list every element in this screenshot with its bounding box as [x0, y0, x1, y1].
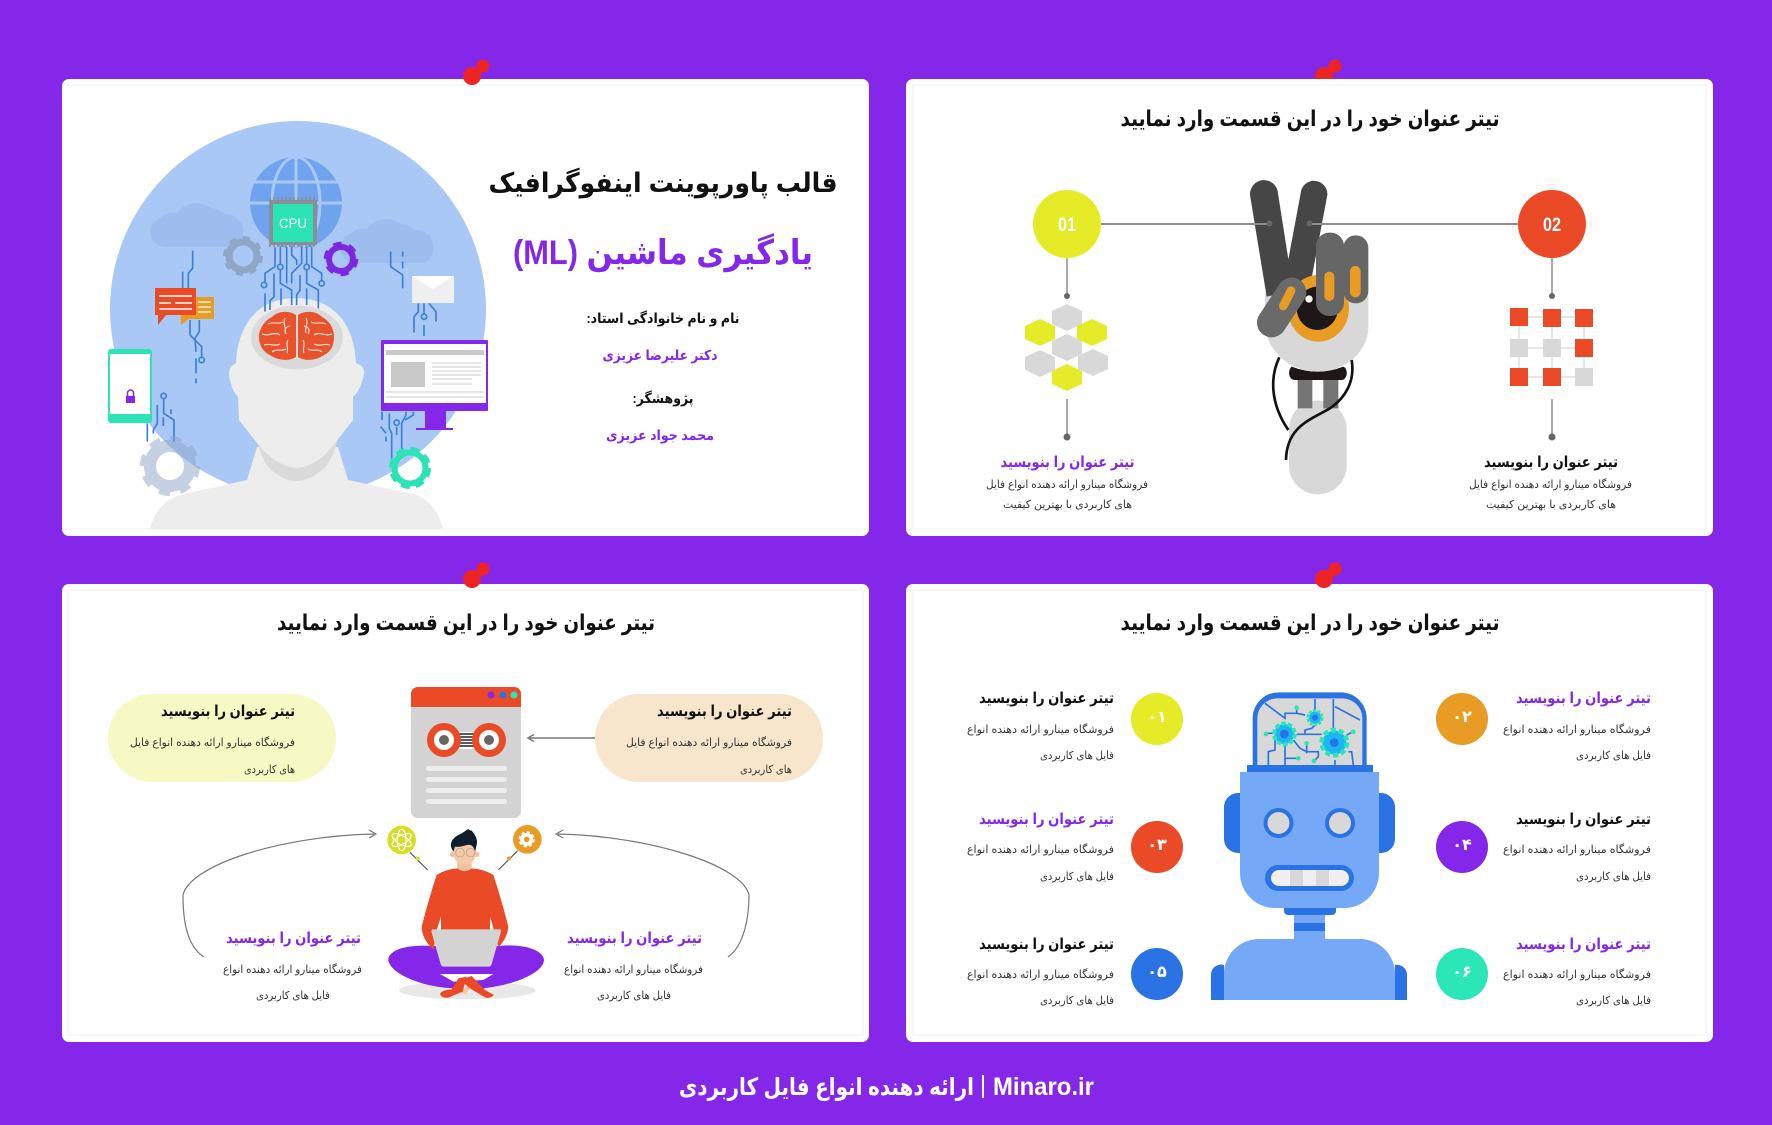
icon: gear bulb [498, 825, 542, 870]
callout: yellow bubble [108, 694, 336, 782]
text block: left caption: فروشگاه مینارو ارائه دهنده انواع فایل [986, 478, 1148, 491]
text block: item 1 [967, 690, 1114, 762]
illustration: robot hand with eye [1250, 180, 1368, 494]
icon: grey gear [225, 238, 261, 274]
icon: square grid network [1510, 308, 1593, 386]
icon: chat bubbles [155, 288, 214, 325]
icon: purple gear [326, 244, 356, 274]
text block: left lower caption [223, 930, 362, 1002]
panel: robot hand slide [906, 79, 1713, 536]
number badge 02 [1518, 190, 1586, 258]
icon: hexagon cluster [1025, 304, 1108, 391]
arrow: right curve [556, 830, 749, 957]
text block: item 4: تیتر عنوان را بنویسید [1516, 811, 1651, 828]
illustration: person with laptop and idea bulbs [387, 825, 544, 999]
figure: seated person [388, 829, 544, 999]
slide title: تیتر عنوان خود را در این قسمت وارد نمایید [1120, 106, 1500, 132]
number badge 01: 01 [1058, 215, 1076, 236]
text block: item 6 [1503, 936, 1651, 1007]
icon: CPU chip: CPU [279, 215, 307, 231]
callout: yellow bubble: تیتر عنوان را بنویسید [161, 703, 295, 720]
number badge 01 [1033, 190, 1101, 258]
text block: item 6: فروشگاه مینارو ارائه دهنده انواع [1503, 968, 1651, 981]
text block: item 5: تیتر عنوان را بنویسید [979, 936, 1114, 953]
text block: item 3: فایل های کاربردی [1040, 871, 1114, 883]
text block: item 5: فایل های کاربردی [1040, 995, 1114, 1007]
text block: item 3: تیتر عنوان را بنویسید [979, 811, 1114, 828]
text block: item 2: تیتر عنوان را بنویسید [1516, 690, 1651, 707]
text block: left caption: های کاربردی با بهترین کیفیت [1003, 499, 1132, 511]
text block: item 1: فایل های کاربردی [1040, 750, 1114, 762]
text block: item 4: فایل های کاربردی [1576, 871, 1651, 883]
figure: human head and shoulders [150, 298, 443, 529]
professor label: نام و نام خانوادگی استاد: [586, 310, 740, 327]
panel: cover slide [62, 79, 869, 536]
icon: left cloud [150, 203, 243, 247]
number badge ۰۴ [1436, 821, 1488, 873]
icon: pin on robot slide [1315, 562, 1342, 588]
number badge ۰۱ [1131, 693, 1183, 745]
text block: left lower caption: فروشگاه مینارو ارائه دهنده انواع [223, 963, 362, 976]
robot brain dome [1253, 692, 1367, 767]
callout: peach bubble: فروشگاه مینارو ارائه دهنده انواع فایل [626, 736, 792, 749]
number badge ۰۴: ۰۴ [1452, 837, 1472, 854]
icon: atom bulb [387, 826, 428, 870]
text block: left caption [986, 454, 1148, 511]
illustration: AI head with technology icons [108, 121, 488, 529]
icon: right cloud [340, 219, 433, 263]
callout: peach bubble: تیتر عنوان را بنویسید [657, 703, 792, 720]
text block: item 3: فروشگاه مینارو ارائه دهنده انواع [967, 843, 1114, 856]
icon: green gear [391, 449, 429, 487]
icon: browser window with robot eyes [411, 687, 521, 818]
slide title: تیتر عنوان خود را در این قسمت وارد نمایید [1120, 610, 1500, 636]
text block: item 2: فایل های کاربردی [1576, 750, 1651, 762]
text block: right caption: فروشگاه مینارو ارائه دهنده انواع فایل [1469, 478, 1632, 491]
number badge ۰۳: ۰۳ [1147, 837, 1167, 854]
icon: globe [250, 157, 342, 249]
callout: peach bubble [595, 694, 823, 782]
text block: item 5 [967, 936, 1114, 1007]
main title: قالب پاورپوینت اینفوگرافیک [488, 167, 838, 199]
number badge 02: 02 [1543, 215, 1561, 236]
callout: yellow bubble: فروشگاه مینارو ارائه دهنده انواع فایل [130, 736, 295, 749]
text block: right lower caption: تیتر عنوان را بنویسید [567, 930, 702, 947]
icon: monitor [381, 340, 488, 430]
footer: Minaro.ir [993, 1073, 1094, 1101]
text block: left caption: تیتر عنوان را بنویسید [1000, 454, 1134, 471]
text block: right lower caption [564, 930, 703, 1002]
number badge ۰۶ [1436, 948, 1488, 1000]
text block: right caption [1469, 454, 1632, 511]
text block: item 6: تیتر عنوان را بنویسید [1516, 936, 1651, 953]
icon: pin on robot hand slide [1315, 60, 1342, 85]
text block: right lower caption: فایل های کاربردی [597, 990, 671, 1002]
text block: item 1: تیتر عنوان را بنویسید [979, 690, 1114, 707]
icon: pin on cover slide [463, 60, 490, 85]
text block: item 5: فروشگاه مینارو ارائه دهنده انواع [967, 968, 1114, 981]
panel: learning cycle slide [62, 584, 869, 1042]
text block: item 1: فروشگاه مینارو ارائه دهنده انواع [967, 723, 1114, 736]
text block: item 2 [1503, 690, 1651, 762]
icon: CPU chip [270, 197, 317, 247]
number badge ۰۱: ۰۱ [1147, 709, 1167, 726]
footer: ارائه دهنده انواع فایل کاربردی [679, 1074, 974, 1101]
icon: envelope [412, 276, 454, 303]
slide title: تیتر عنوان خود را در این قسمت وارد نمایید [277, 610, 655, 636]
text block: item 3 [967, 811, 1114, 883]
number badge ۰۲: ۰۲ [1452, 709, 1472, 726]
panel: robot slide [906, 584, 1713, 1042]
illustration: robot [1211, 692, 1407, 1000]
text block: item 4 [1503, 811, 1651, 883]
subtitle: یادگیری ماشین (ML) [513, 233, 813, 273]
callout: yellow bubble: های کاربردی [244, 764, 295, 776]
icon: pin on learning cycle slide [463, 562, 490, 588]
researcher label: پژوهشگر: [632, 390, 694, 407]
text block: item 4: فروشگاه مینارو ارائه دهنده انواع [1503, 843, 1651, 856]
circuit lines [147, 247, 436, 462]
number badge ۰۵: ۰۵ [1147, 964, 1167, 981]
text block: left lower caption: فایل های کاربردی [256, 990, 330, 1002]
number badge ۰۵ [1131, 948, 1183, 1000]
researcher name: محمد جواد عزیزی [606, 427, 714, 444]
text block: right caption: تیتر عنوان را بنویسید [1484, 454, 1618, 471]
connector lines [1064, 220, 1556, 440]
text block: right lower caption: فروشگاه مینارو ارائه دهنده انواع [564, 963, 703, 976]
icon: smartphone with lock [108, 349, 152, 423]
number badge ۰۲ [1436, 693, 1488, 745]
text block: item 6: فایل های کاربردی [1576, 995, 1651, 1007]
arrow: bubble to window [528, 734, 595, 742]
arrow: left curve [183, 830, 376, 957]
number badge ۰۶: ۰۶ [1452, 964, 1472, 981]
icon: large pale gear [143, 439, 197, 493]
number badge ۰۳ [1131, 821, 1183, 873]
callout: peach bubble: های کاربردی [740, 764, 792, 776]
icon: brain [251, 306, 343, 370]
professor name: دکتر علیرضا عزیزی [602, 347, 718, 364]
text block: left lower caption: تیتر عنوان را بنویسید [226, 930, 361, 947]
text block: right caption: های کاربردی با بهترین کیفیت [1486, 499, 1616, 511]
text block: item 2: فروشگاه مینارو ارائه دهنده انواع [1503, 723, 1651, 736]
